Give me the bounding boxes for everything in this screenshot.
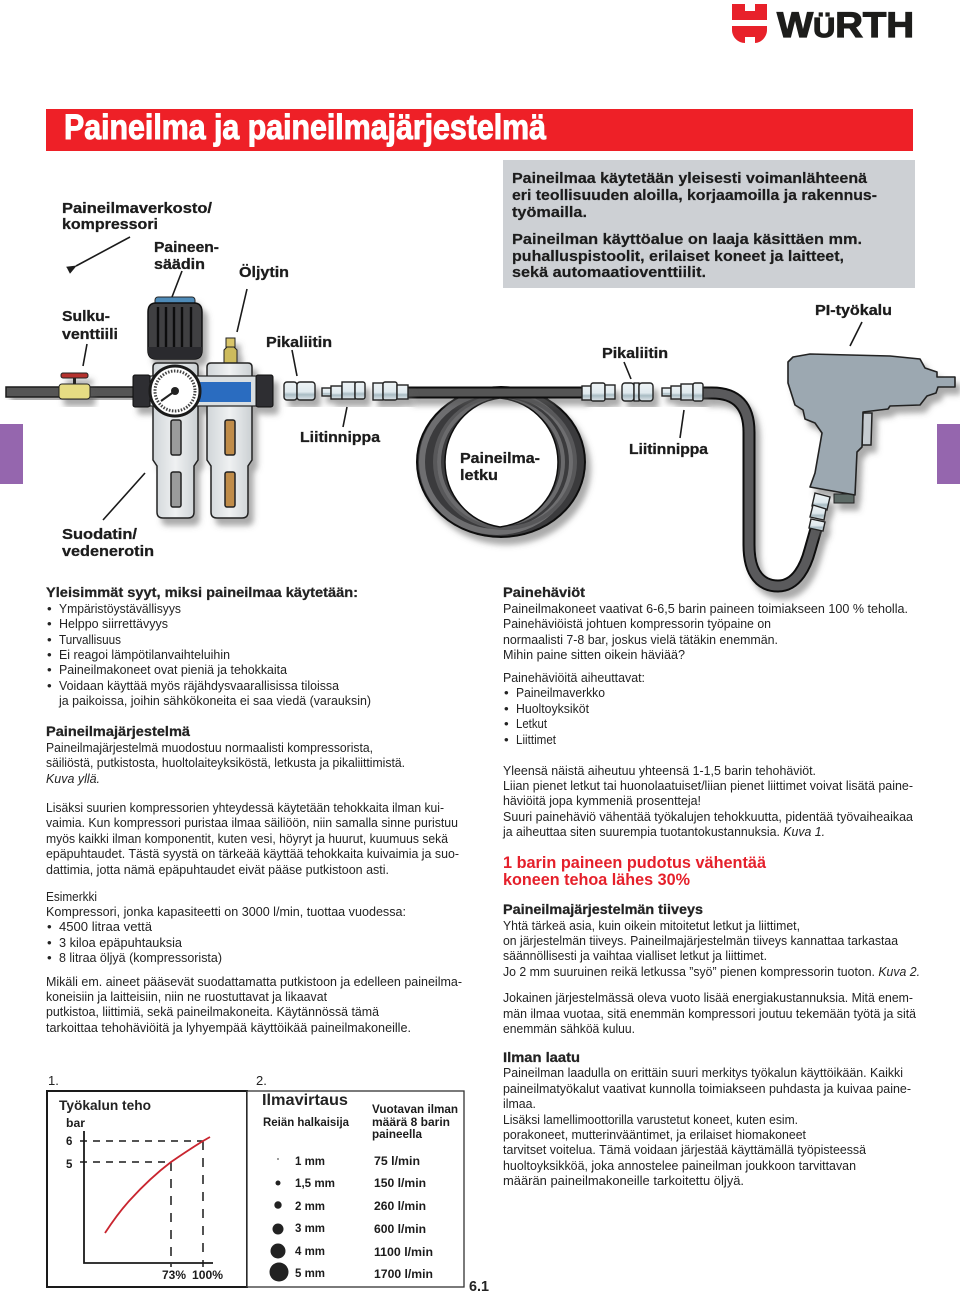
diagram labels: letku [460,467,498,484]
chart: tool power vs pressure: 100% [192,1270,223,1282]
table: air flow through holes: 600 l/min [374,1224,426,1236]
text block: example: Mikäli em. aineet pääsevät suodattamatta putkistoon ja edelleen paineilma- [46,974,462,989]
text block: tightness: enemmän sähköä kuluu. [503,1021,635,1036]
panel: intro text: puhalluspistoolit, erilaiset koneet ja laitteet, [512,249,844,265]
text block: example [46,889,462,1035]
chart: tool power vs pressure: bar [66,1118,86,1130]
text block: air quality: porakoneet, mutterinvääntimet, ja erilaiset hiomakoneet [503,1127,806,1142]
diagram labels: kompressori [62,216,158,233]
diagram labels: Öljytin [239,264,289,281]
table: air flow through holes: 1,5 mm [295,1178,335,1190]
text block: common reasons: Voidaan käyttää myös räjähdysvaarallisissa tiloissa [59,678,340,693]
text block: tightness: Jokainen järjestelmässä oleva vuoto lisää energiakustannuksia. Mitä enem- [503,990,913,1005]
callout: red statement [503,853,767,889]
text block: common reasons: • [47,662,52,677]
text block: pressure losses: Mihin paine sitten oikein häviää? [503,647,685,662]
text block: air quality: paineilmatyökalut vaativat kunnolla toimiakseen puhdasta ja kuivaa paine- [503,1081,911,1096]
text block: example: 3 kiloa epäpuhtauksia [59,935,183,950]
text block: common reasons: • [47,678,52,693]
text block: air quality: tarvitset voitelua. Tämä voidaan järjestää käyttämällä työpisteessä [503,1142,867,1157]
text block: common reasons: • [47,647,52,662]
icon: inlet pipe [6,387,136,397]
text block: pressure losses: Liittimet [516,732,556,747]
text block: system: Kuva yllä. [46,771,100,786]
diagram labels: vedenerotin [62,543,154,560]
text block: pressure losses: Paineilmaverkko [516,685,605,700]
text block: tightness [503,901,920,1036]
text block: system: säiliöstä, putkistosta, huoltolaiteyksiköstä, letkusta ja pikaliittimistä. [46,755,405,770]
icon: pressure gauge [150,366,200,416]
text block: system: Lisäksi suurien kompressorien yhteydessä käytetään tehokkaita ilman kui- [46,800,444,815]
text block: common reasons: Yleisimmät syyt, miksi paineilmaa käytetään: [46,584,358,600]
text block: pressure losses [502,584,914,839]
table: air flow through holes: 75 l/min [374,1156,420,1168]
icon: filter regulator and lubricator unit [133,297,273,518]
text block: tightness: män ilmaa vuotaa, sitä enemmän kompressori joutuu tekemään työtä ja sitä [503,1006,917,1021]
text block: pressure losses: Huoltoyksiköt [516,701,589,716]
text block: system [46,723,459,877]
callout: red statement: koneen tehoa lähes 30% [503,870,690,889]
text block: tightness: Yhtä tärkeä asia, kuin oikein mitoitetut letkut ja liittimet, [503,918,800,933]
icon: hose lines [408,392,816,586]
text block: pressure losses: Liian pienet letkut tai huonolaatuiset/liian pienet liittimet voivat lisätä paine- [503,778,913,793]
diagram labels: Suodatin/ [62,526,138,543]
text block: pressure losses: • [504,732,509,747]
icon: shut-off valve [59,373,90,399]
text block: system: dattimia, jotta nämä epäpuhtaudet eivät pääse putkistoon asti. [46,862,389,877]
text block: air quality: huoltoyksikköä, joka annostelee paineilman joukkoon tarvittavan [503,1158,856,1173]
text block: example: tarkoittaa tehohäviöitä ja lyhyempää käyttöikää paineilmakoneille. [46,1020,411,1035]
text block: pressure losses: normaalisti 7-8 bar, joskus vielä tätäkin enemmän. [503,632,778,647]
text block: system: myös kaikki ilman komponentit, kuten vesi, höyryt ja huurut, kuumuus sekä [46,831,449,846]
text block: pressure losses: Painehäviöt [503,584,585,600]
text block: tightness: Jo 2 mm suuruinen reikä letkussa ”syö” pienen kompressorin tuoton. Kuva 2. [503,964,920,979]
text block: example: putkistoa, liittimiä, sekä paineilmakoneita. Käytännössä tämä [46,1004,380,1019]
text block: common reasons: • [47,601,52,616]
text block: tightness: säännöllisesti ja vaihtaa vialliset letkut ja liittimet. [503,948,767,963]
text block: tightness: on järjestelmän tiiveys. Paineilmajärjestelmän tiiveys kannattaa tarkastaa [503,933,899,948]
text block: example: koneisiin ja laitteisiin, niin ne ruostuttavat ja likaavat [46,989,327,1004]
text block: common reasons: • [47,632,52,647]
text block: common reasons [46,584,371,708]
table: air flow through holes: 2. [256,1073,267,1088]
diagram: compressed air system [6,237,955,586]
table: air flow through holes: 3 mm [295,1223,325,1235]
text block: air quality: määrän paineilmakoneille tarkoitettu öljyä. [503,1173,744,1188]
table: air flow through holes: Reiän halkaisija [263,1117,350,1129]
text block: pressure losses: häviöitä jopa kymmeniä prosentteja! [503,793,701,808]
logo: Würth [732,4,914,45]
title band [46,108,913,151]
text block: pressure losses: • [504,716,509,731]
text block: system: vaimia. Kun kompressori puristaa ilmaa säiliöön, niin samalla sinne puristuu [46,815,458,830]
table: air flow through holes: 1700 l/min [374,1269,433,1281]
diagram labels: Pikaliitin [602,345,668,362]
diagram labels: Pikaliitin [266,334,332,351]
text block: common reasons: Turvallisuus [59,632,121,647]
icon: air hose coil [417,387,585,537]
text block: common reasons: Paineilmakoneet ovat pieniä ja tehokkaita [59,662,288,677]
table: air flow through holes: 150 l/min [374,1178,426,1190]
text block: example: 8 litraa öljyä (kompressorista) [59,950,222,965]
text block: pressure losses: ja aiheuttaa siten suurempia tuotantokustannuksia. Kuva 1. [502,824,825,839]
panel: intro text: Paineilmaa käytetään yleisesti voimanlähteenä [512,171,868,187]
text block: air quality: Lisäksi lamellimoottorilla varustetut koneet, kuten esim. [503,1112,798,1127]
callout: red statement: 1 barin paineen pudotus vähentää [503,853,767,872]
text block: pressure losses: • [504,701,509,716]
diagram labels: venttiili [62,326,118,343]
table: air flow through holes [247,1073,464,1287]
text block: example: • [47,935,52,950]
chart: tool power vs pressure: 5 [66,1159,73,1171]
text block: system: epäpuhtaudet. Tästä syystä on tärkeää käyttää tehokkaita kuivaimia ja suo- [46,846,459,861]
side tab left [0,424,23,484]
text block: pressure losses: Yleensä näistä aiheutuu yhteensä 1-1,5 barin tehohäviöt. [503,763,816,778]
table: air flow through holes: määrä 8 barin [372,1117,450,1129]
text block: air quality: ilmaa. [503,1096,536,1111]
table: air flow through holes: Ilmavirtaus [262,1092,348,1109]
table: air flow through holes: 2 mm [295,1201,325,1213]
chart: tool power vs pressure: 6 [66,1136,72,1148]
text block: example: 4500 litraa vettä [59,919,153,934]
diagram labels: Liitinnippa [300,429,381,446]
text block: pressure losses: Suuri painehäviö vähentää työkalujen tehokkuutta, pidentää työvaiheaikaa [503,809,914,824]
text block: common reasons: • [47,616,52,631]
text block: tightness: Paineilmajärjestelmän tiiveys [503,901,703,917]
text block: common reasons: Ei reagoi lämpötilanvaihteluihin [59,647,230,662]
table: air flow through holes: Vuotavan ilman [372,1104,458,1116]
icon: couplings [284,382,703,401]
icon: air impact tool [788,354,955,531]
table: air flow through holes: 4 mm [295,1246,325,1258]
text block: example: • [47,919,52,934]
table: air flow through holes: 260 l/min [374,1201,426,1213]
text block: system: Paineilmajärjestelmä muodostuu normaalisti kompressorista, [46,740,373,755]
chart: tool power vs pressure: 1. [48,1073,59,1088]
panel: intro text: työmailla. [512,205,587,221]
text block: pressure losses: Letkut [516,716,547,731]
text block: pressure losses: Painehäviöistä johtuen kompressorin työpaine on [503,616,771,631]
text block: common reasons: Ympäristöystävällisyys [59,601,181,616]
text block: pressure losses: Painehäviöitä aiheuttavat: [503,670,645,685]
title band: Paineilma ja paineilmajärjestelmä [64,108,546,147]
text block: air quality [503,1049,911,1188]
diagram labels: PI-työkalu [815,302,892,319]
text block: example: • [47,950,52,965]
text block: system: Paineilmajärjestelmä [46,723,190,739]
text block: pressure losses: Paineilmakoneet vaativat 6-6,5 barin paineen toimiakseen 100 % teholla. [503,601,908,616]
diagram labels: Paineen- [154,239,219,256]
diagram labels: Liitinnippa [629,441,709,458]
logo: Würth: WÜRTH [777,6,914,45]
text block: example: Kompressori, jonka kapasiteetti on 3000 l/min, tuottaa vuodessa: [46,904,406,919]
diagram labels: Paineilmaverkosto/ [62,200,213,217]
text block: air quality: Paineilman laadulla on erittäin suuri merkitys työkalun käyttöikään. Kaikki [503,1065,903,1080]
panel: intro text [503,160,915,288]
panel: intro text: Paineilman käyttöalue on laaja käsittäen mm. [512,232,862,248]
text block: example: Esimerkki [46,889,97,904]
diagram labels: Paineilma- [460,450,540,467]
panel: intro text: eri teollisuuden aloilla, korjaamoilla ja rakennus- [512,188,877,204]
panel: intro text: sekä automaatioventtiilit. [512,265,706,281]
chart: tool power vs pressure [47,1073,247,1287]
chart: tool power vs pressure: Työkalun teho [59,1098,151,1113]
table: air flow through holes: 1100 l/min [374,1247,433,1259]
table: air flow through holes: 5 mm [295,1268,325,1280]
leader lines [76,237,862,520]
text block: common reasons: Helppo siirrettävyys [59,616,168,631]
text block: air quality: Ilman laatu [503,1049,580,1065]
diagram labels: säädin [154,256,205,273]
table: air flow through holes: paineella [372,1129,423,1141]
side tab right [937,424,960,484]
chart: tool power vs pressure: 73% [162,1270,186,1282]
diagram labels [62,200,892,560]
diagram labels: Sulku- [62,308,110,325]
text block: pressure losses: • [504,685,509,700]
text block: common reasons: ja paikoissa, joihin sähkökoneita ei saa viedä (varauksin) [58,693,371,708]
table: air flow through holes: 1 mm [295,1156,325,1168]
